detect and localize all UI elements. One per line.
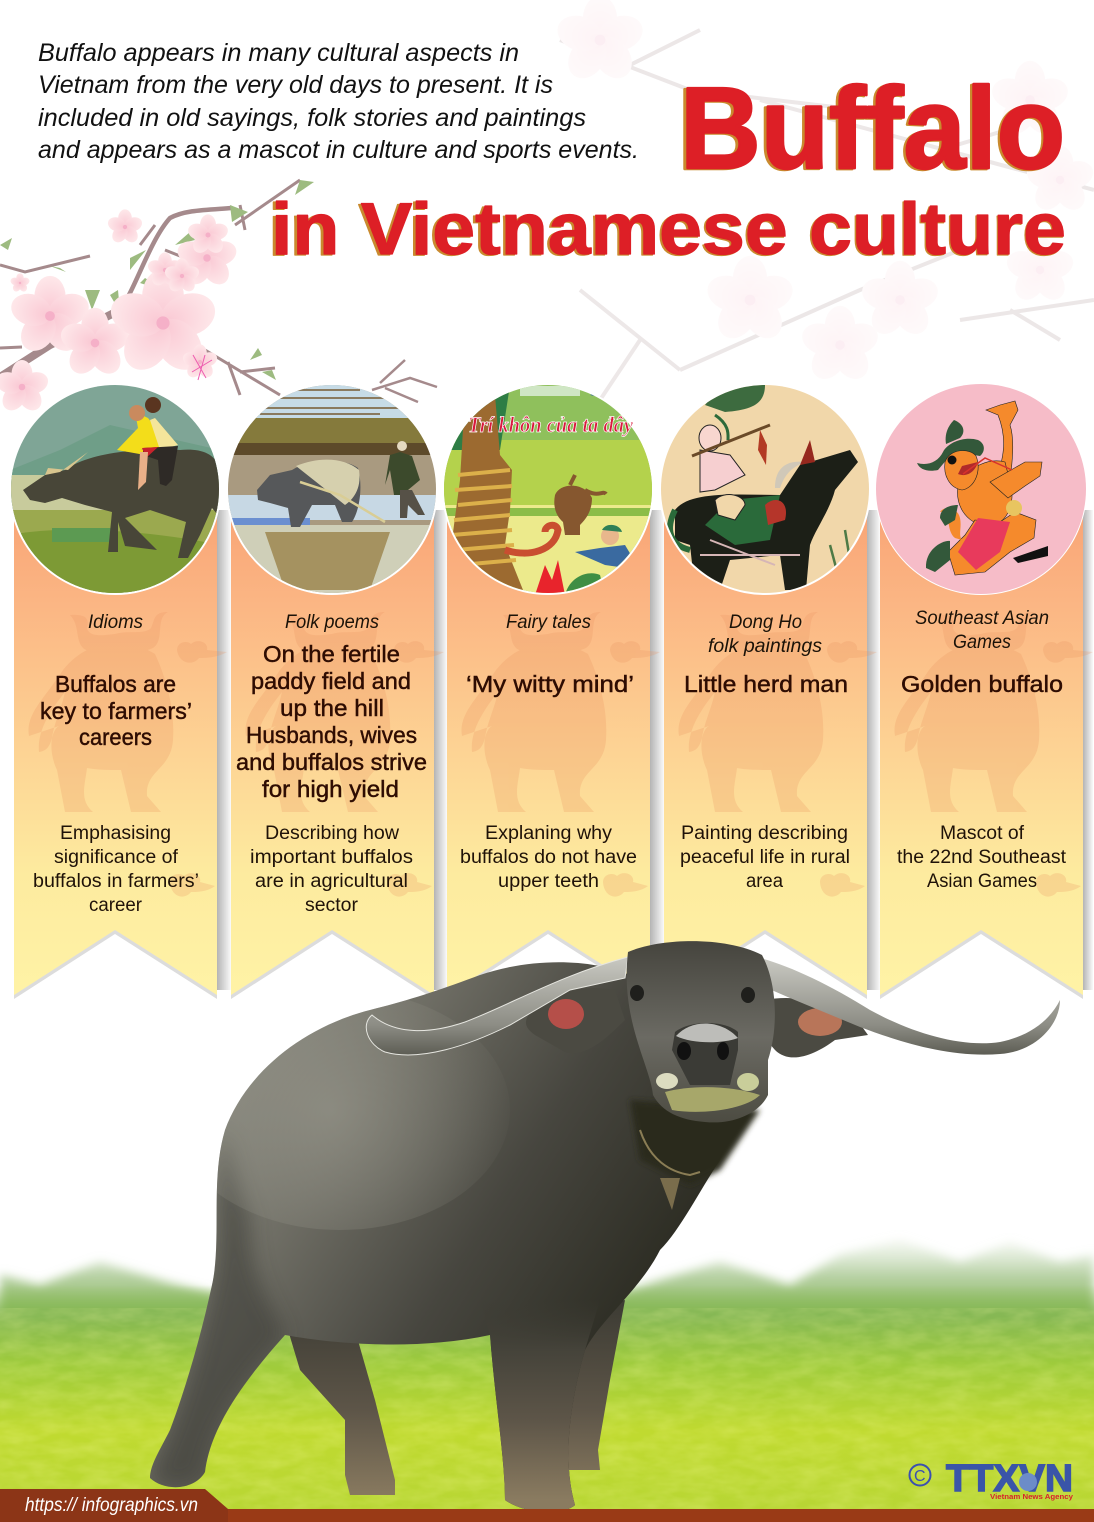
heading: key to farmers’ (40, 698, 192, 724)
main buffalo (150, 941, 1060, 1512)
heading (236, 641, 427, 802)
title (268, 63, 1066, 271)
label: Southeast Asian (915, 608, 1049, 629)
description: the 22nd Southeast (897, 847, 1067, 868)
dewlap and neck rope (630, 1100, 760, 1210)
description: Describing how (265, 823, 399, 844)
grass field (0, 1240, 1094, 1510)
description: Emphasising (60, 823, 171, 844)
description (897, 823, 1067, 892)
title: in Vietnamese culture (268, 190, 1065, 271)
book title: Trí khôn của ta đây (468, 412, 633, 437)
description: Asian Games (927, 871, 1037, 892)
description: upper teeth (498, 871, 599, 892)
heading (40, 671, 192, 750)
description (250, 823, 413, 916)
description: important buffalos (250, 847, 413, 868)
label (915, 608, 1049, 653)
right ear (762, 998, 868, 1057)
heading: On the fertile (263, 641, 400, 667)
copyright and agency logo: TTXVN (946, 1458, 1073, 1500)
footer url tab (0, 1489, 228, 1522)
description: are in agricultural (255, 871, 408, 892)
heading: careers (79, 724, 152, 750)
description: Mascot of (940, 823, 1025, 844)
body (150, 962, 740, 1512)
label: folk paintings (708, 636, 823, 657)
panel: southeast asian games (875, 383, 1093, 999)
description: area (746, 871, 783, 892)
heading: ‘My witty mind’ (466, 671, 634, 697)
panel: dong ho folk paintings (655, 380, 877, 999)
panel: folk poems (225, 360, 444, 999)
label: Folk poems (285, 612, 379, 633)
description: significance of (54, 847, 179, 868)
description: sector (305, 895, 359, 916)
circle photo: dong ho painting (655, 380, 875, 600)
heading: Buffalos are (55, 671, 176, 697)
left ear (526, 988, 625, 1053)
description: Painting describing (681, 823, 848, 844)
label: Games (953, 632, 1011, 653)
intro text (38, 39, 639, 164)
label: Fairy tales (506, 612, 591, 633)
faded blossom branches, top right (553, 0, 1094, 400)
footer bar (0, 1509, 1094, 1522)
heading: paddy field and (251, 668, 411, 694)
intro text: Buffalo appears in many cultural aspects in (38, 39, 519, 67)
heading: up the hill (280, 695, 384, 721)
circle photo: ploughing paddy field (225, 380, 440, 600)
front leg (480, 1300, 600, 1512)
right horn (760, 958, 1060, 1055)
description: Explaning why (485, 823, 613, 844)
twig over circle (372, 360, 437, 402)
panel: idioms (9, 380, 227, 999)
heading: and buffalos strive (236, 749, 427, 775)
far legs (285, 1300, 625, 1495)
circle photo: golden buffalo mascot (875, 383, 1087, 595)
muzzle (656, 1023, 760, 1112)
description: buffalos do not have (460, 847, 637, 868)
head (627, 941, 775, 1122)
label: Dong Ho (729, 612, 802, 633)
intro text: included in old sayings, folk stories and paintings (38, 104, 586, 132)
circle photo: children on buffalo (9, 380, 222, 600)
intro text: and appears as a mascot in culture and sports events. (38, 136, 639, 164)
heading: for high yield (262, 776, 399, 802)
title: Buffalo (677, 64, 1063, 194)
heading: Golden buffalo (901, 671, 1063, 697)
blossom branch, left (0, 180, 314, 415)
description (460, 823, 637, 892)
ribbon shadows (217, 510, 1093, 990)
description: buffalos in farmers’ (33, 871, 199, 892)
eyes (630, 985, 755, 1003)
title: in Vietnamese culture (271, 189, 1066, 270)
heading: Little herd man (684, 671, 848, 697)
footer url tab: https:// infographics.vn (25, 1495, 198, 1516)
description (680, 823, 850, 892)
left horn (366, 957, 628, 1055)
panel: fairy tales (440, 380, 660, 999)
intro text: Vietnam from the very old days to present. It is (38, 71, 553, 99)
label: Idioms (88, 612, 143, 633)
copyright and agency logo: Vietnam News Agency (990, 1492, 1074, 1501)
circle photo: book cover (440, 380, 655, 600)
description (33, 823, 199, 916)
description: peaceful life in rural (680, 847, 850, 868)
heading: Husbands, wives (246, 722, 417, 748)
description: career (89, 895, 143, 916)
body shading (150, 990, 510, 1487)
title: Buffalo (680, 63, 1065, 193)
label (708, 612, 823, 657)
copyright and agency logo: C (914, 1468, 926, 1485)
